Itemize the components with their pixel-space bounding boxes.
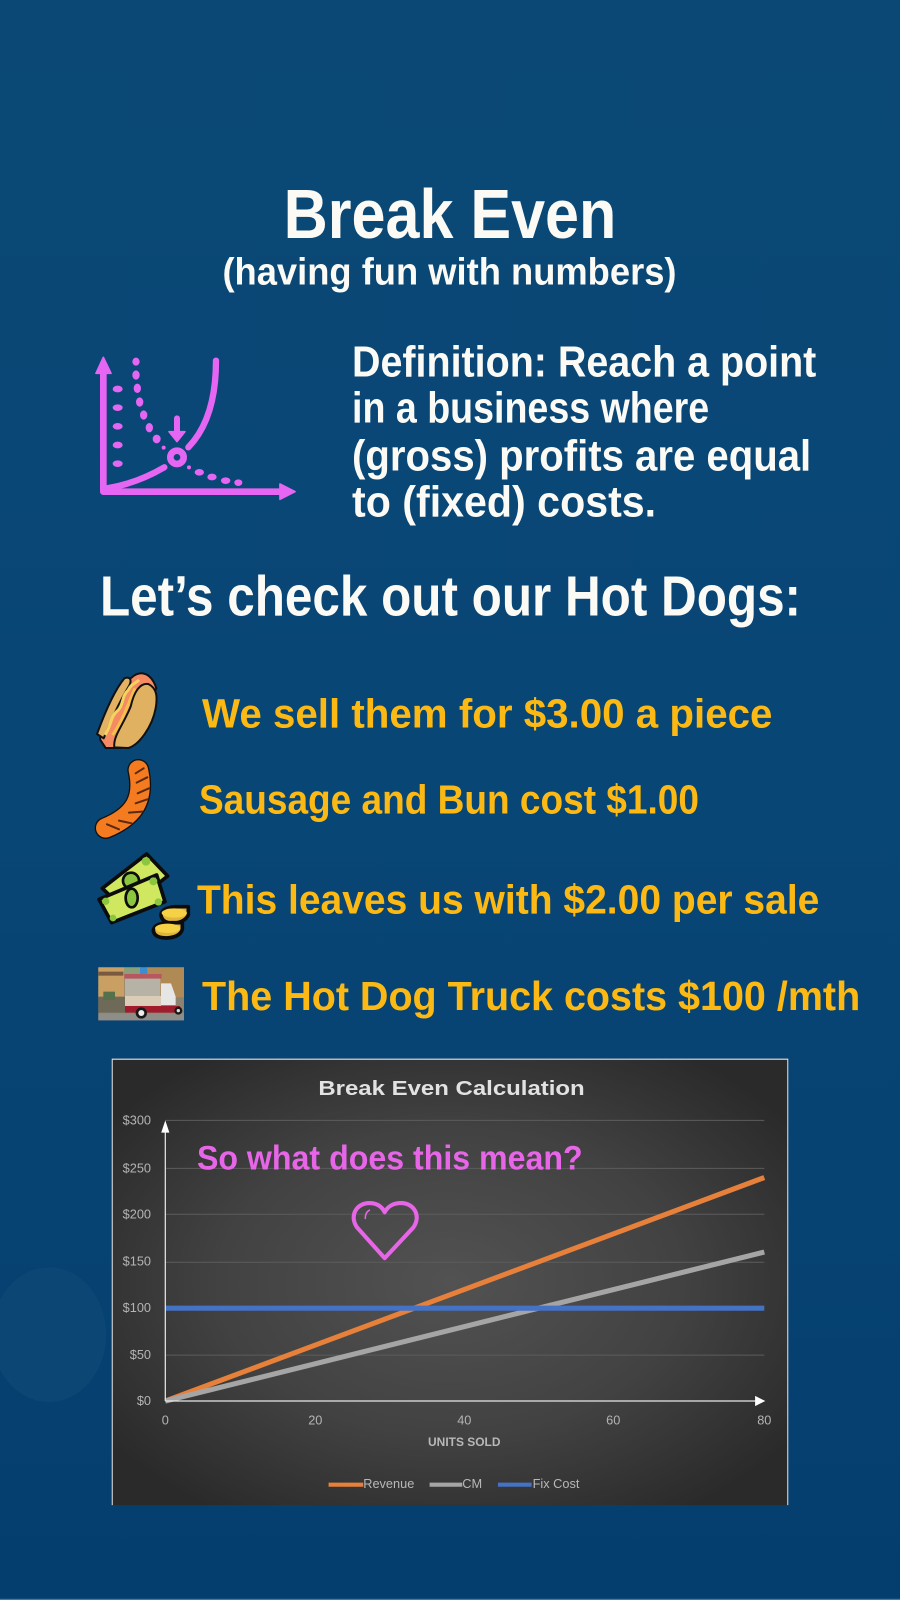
panel: break even chart (112, 1059, 788, 1505)
x axis title: UNITS SOLD (428, 1435, 501, 1449)
x axis labels: 40 (457, 1412, 471, 1427)
line: revenue (165, 1178, 764, 1401)
legend: Fix Cost (533, 1476, 580, 1491)
y axis labels: $200 (123, 1206, 151, 1221)
chart axes (161, 1120, 765, 1406)
icon: hot dog truck photo (98, 967, 184, 1020)
line: fixed cost (165, 1306, 764, 1311)
definition text: (gross) profits are equal (352, 431, 811, 480)
subtitle: (having fun with numbers) (222, 251, 677, 293)
icon: money (99, 854, 188, 938)
text: price: We sell them for $3.00 a piece (202, 691, 772, 737)
definition text: Definition: Reach a point (352, 338, 817, 387)
x axis labels: 60 (606, 1412, 620, 1427)
icon: break-even graph (96, 357, 295, 499)
text: margin: This leaves us with $2.00 per sale (197, 876, 819, 922)
text: fixed cost: The Hot Dog Truck costs $100 /mth (202, 973, 860, 1019)
definition text: to (fixed) costs. (352, 477, 656, 526)
y axis labels (123, 1112, 151, 1408)
definition text: in a business where (352, 383, 709, 432)
legend: CM (462, 1476, 482, 1491)
x axis labels: 0 (162, 1412, 169, 1427)
y axis labels: $0 (137, 1393, 151, 1408)
y axis labels: $50 (130, 1347, 151, 1362)
x axis labels (162, 1412, 771, 1427)
chart title: Break Even Calculation (318, 1078, 585, 1100)
definition text (352, 338, 817, 526)
annotation: So what does this mean? (197, 1139, 583, 1177)
text: cost: Sausage and Bun cost $1.00 (199, 776, 699, 822)
y axis labels: $250 (123, 1160, 151, 1175)
icon: sausage (106, 768, 149, 829)
icon: heart (354, 1203, 417, 1258)
legend: Revenue (363, 1476, 414, 1491)
y axis labels: $150 (123, 1253, 151, 1268)
title: Break Even (284, 175, 616, 253)
icon: hot dog (97, 673, 157, 748)
x axis labels: 20 (308, 1412, 322, 1427)
heading: hot dogs: Let’s check out our Hot Dogs: (100, 564, 801, 627)
y axis labels: $300 (123, 1112, 151, 1127)
line: contribution margin (165, 1252, 764, 1401)
y axis labels: $100 (123, 1300, 151, 1315)
x axis labels: 80 (757, 1412, 771, 1427)
legend (329, 1476, 580, 1491)
